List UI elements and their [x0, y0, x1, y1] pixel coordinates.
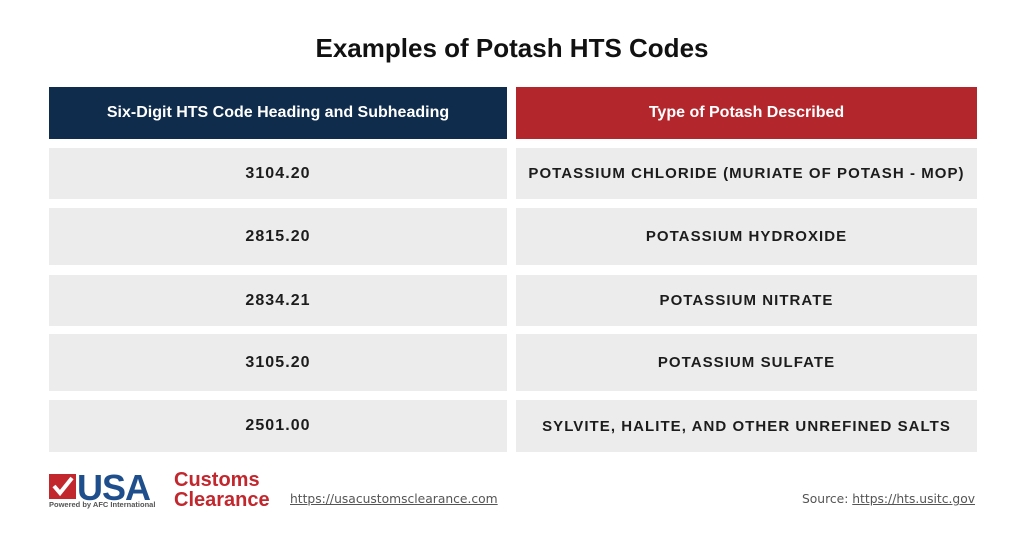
row 2: POTASSIUM HYDROXIDE: [646, 228, 847, 245]
link: https://usacustomsclearance.com: [290, 492, 498, 506]
row 3: [49, 275, 977, 326]
row 5: 2501.00: [245, 417, 311, 434]
row 2: 2815.20: [245, 228, 311, 244]
header: type column: Type of Potash Described: [649, 104, 844, 121]
icon: checkbox: [49, 474, 76, 499]
logo: Powered by AFC International: [49, 500, 155, 509]
row 5: SYLVITE, HALITE, AND OTHER UNREFINED SALTS: [542, 418, 951, 434]
row 4: POTASSIUM SULFATE: [658, 354, 835, 371]
row 3: 2834.21: [245, 292, 311, 308]
logo: USA: [77, 467, 150, 508]
header: type column: [516, 87, 977, 139]
row 3: POTASSIUM NITRATE: [660, 292, 833, 309]
source: Source: https://hts.usitc.gov: [802, 492, 975, 506]
header: code column: Six-Digit HTS Code Heading and Subheading: [107, 104, 449, 121]
row 1: 3104.20: [245, 164, 311, 182]
logo: [49, 467, 270, 511]
logo: Clearance: [174, 489, 270, 511]
row 1: [49, 148, 977, 199]
row 2: [49, 208, 977, 265]
row 4: 3105.20: [245, 354, 311, 370]
title: Examples of Potash HTS Codes: [316, 32, 708, 62]
row 4: [49, 334, 977, 391]
logo: Customs: [174, 469, 260, 491]
header: code column: [49, 87, 507, 139]
row 1: POTASSIUM CHLORIDE (MURIATE OF POTASH - MOP): [528, 165, 965, 182]
row 5: [49, 400, 977, 452]
